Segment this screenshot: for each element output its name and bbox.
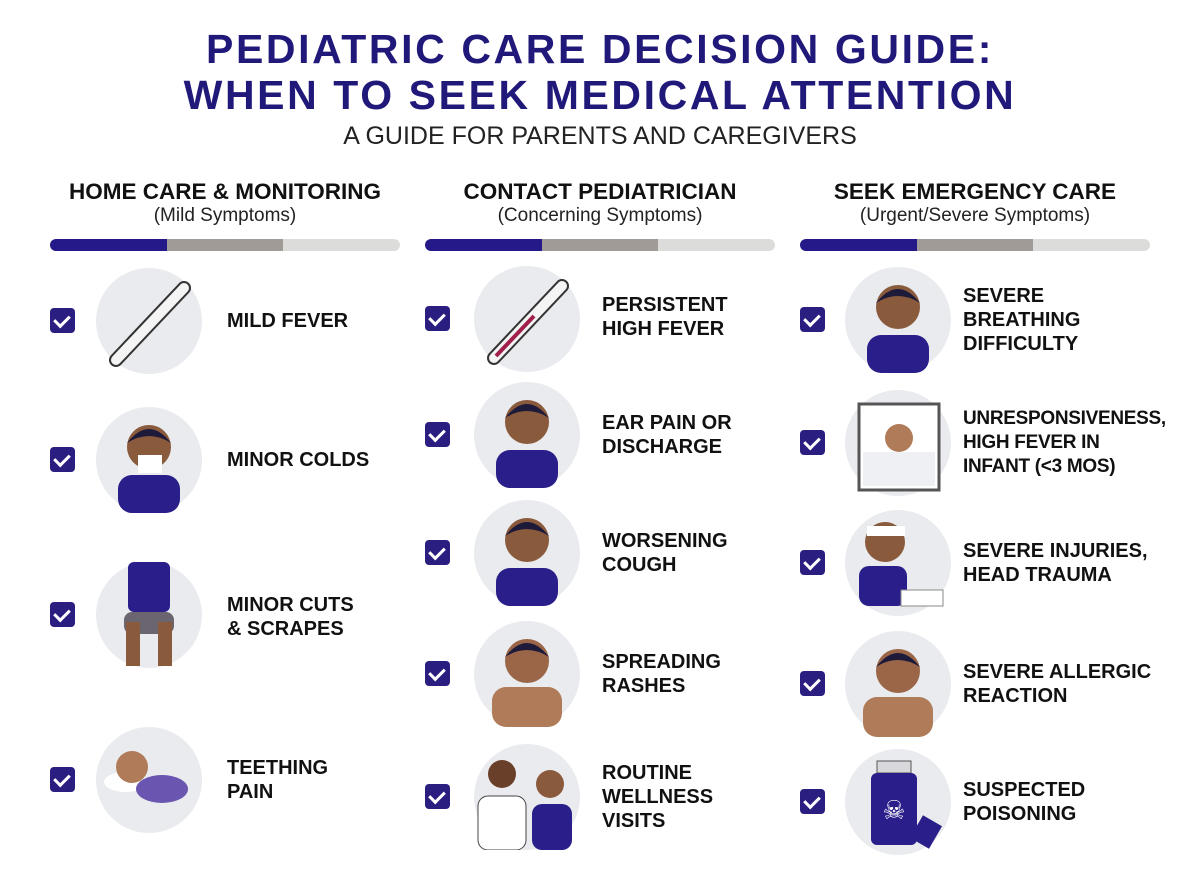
- item: unresponsiveness: HIGH FEVER IN: [963, 432, 1100, 453]
- item: ear pain: DISCHARGE: [602, 436, 722, 458]
- item: spreading rashes: [425, 621, 721, 727]
- item: spreading rashes: SPREADING: [602, 651, 721, 673]
- item: severe breathing difficulty: SEVERE: [963, 285, 1044, 307]
- item: worsening cough: WORSENING: [602, 530, 728, 552]
- item: teething pain: [50, 727, 328, 833]
- item: severe allergic reaction: REACTION: [963, 685, 1067, 707]
- item: minor cuts: MINOR CUTS: [227, 594, 354, 616]
- item: minor cuts: & SCRAPES: [227, 618, 344, 640]
- item: suspected poisoning: POISONING: [963, 803, 1076, 825]
- title: WHEN TO SEEK MEDICAL ATTENTION: [184, 72, 1016, 118]
- item: ear pain: [425, 382, 732, 488]
- item: routine wellness visits: [425, 744, 713, 850]
- item: ear pain: EAR PAIN OR: [602, 412, 732, 434]
- item: spreading rashes: RASHES: [602, 675, 685, 697]
- item: severe injuries: SEVERE INJURIES,: [963, 540, 1148, 562]
- item: teething pain: TEETHING: [227, 757, 328, 779]
- item: severe allergic reaction: SEVERE ALLERGIC: [963, 661, 1151, 683]
- item: unresponsiveness: [800, 390, 1166, 496]
- column 1 header: HOME CARE & MONITORING: [69, 179, 381, 204]
- title: PEDIATRIC CARE DECISION GUIDE:: [206, 26, 994, 72]
- item: unresponsiveness: UNRESPONSIVENESS,: [963, 408, 1166, 429]
- item: severe breathing difficulty: DIFFICULTY: [963, 333, 1078, 355]
- item: minor colds: MINOR COLDS: [227, 449, 369, 471]
- item: severe injuries: [800, 510, 1148, 616]
- item: routine wellness visits: WELLNESS: [602, 786, 713, 808]
- item: severe injuries: HEAD TRAUMA: [963, 564, 1112, 586]
- item: suspected poisoning: [800, 749, 1085, 855]
- item: worsening cough: [425, 500, 728, 606]
- item: severe allergic reaction: [800, 631, 1151, 737]
- item: severe breathing difficulty: BREATHING: [963, 309, 1080, 331]
- item: teething pain: PAIN: [227, 781, 273, 803]
- item: unresponsiveness: INFANT (<3 MOS): [963, 456, 1115, 477]
- title: [184, 26, 1016, 118]
- column 2 header: (Concerning Symptoms): [498, 205, 702, 226]
- column 3 header: (Urgent/Severe Symptoms): [860, 205, 1090, 226]
- column 3 header: SEEK EMERGENCY CARE: [834, 179, 1116, 204]
- item: worsening cough: COUGH: [602, 554, 676, 576]
- column 3 header: [800, 179, 1150, 251]
- item: severe breathing difficulty: [800, 267, 1080, 373]
- item: persistent high fever: PERSISTENT: [602, 294, 728, 316]
- subtitle: A GUIDE FOR PARENTS AND CAREGIVERS: [343, 122, 857, 150]
- column 2 header: [425, 179, 775, 251]
- item: suspected poisoning: SUSPECTED: [963, 779, 1085, 801]
- item: suspected poisoning: ☠: [882, 795, 906, 825]
- column 1 header: (Mild Symptoms): [154, 205, 296, 226]
- item: persistent high fever: HIGH FEVER: [602, 318, 724, 340]
- column 1 header: [50, 179, 400, 251]
- item: routine wellness visits: VISITS: [602, 810, 665, 832]
- item: minor cuts: [50, 562, 354, 668]
- item: mild fever: [50, 268, 348, 374]
- item: minor colds: [50, 407, 369, 513]
- column 2 header: CONTACT PEDIATRICIAN: [464, 179, 736, 204]
- item: persistent high fever: [425, 266, 728, 372]
- item: routine wellness visits: ROUTINE: [602, 762, 692, 784]
- item: mild fever: MILD FEVER: [227, 310, 348, 332]
